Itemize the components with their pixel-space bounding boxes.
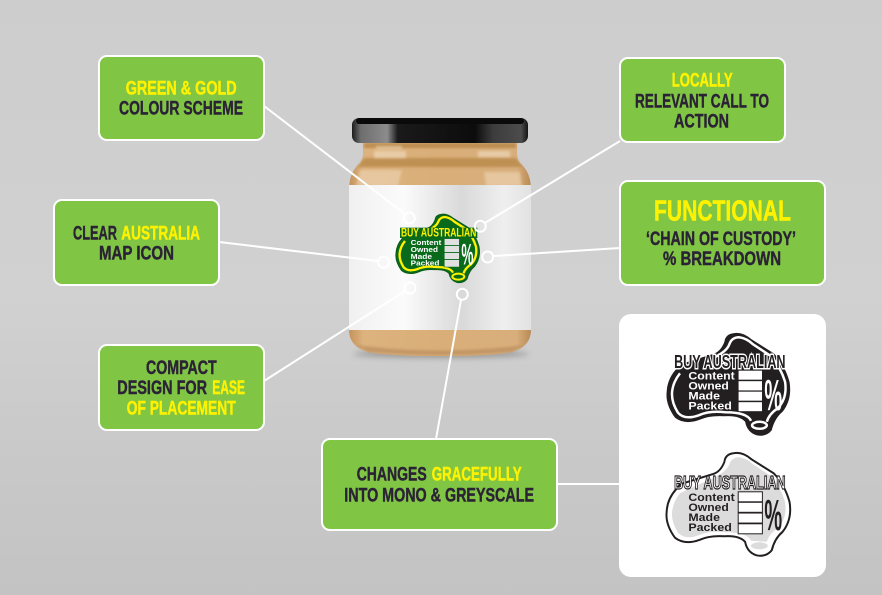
callout: map icon: CLEAR: [73, 223, 117, 245]
callout: mono and greyscale: INTO MONO & GREYSCALE: [344, 485, 534, 507]
callout: call to action: LOCALLY: [672, 70, 733, 92]
map shape: [666, 333, 790, 436]
row labels: [688, 492, 735, 534]
callout: compact design: DESIGN FOR: [117, 377, 207, 399]
island ring: [752, 422, 767, 429]
connector: call to action: [485, 141, 620, 223]
callout: call to action: [620, 58, 785, 142]
percentage boxes: [738, 370, 762, 412]
row labels: Content: [688, 370, 735, 382]
island ring: [452, 274, 464, 280]
callout: call to action: RELEVANT CALL TO: [635, 90, 769, 112]
neck highlights: [374, 146, 510, 158]
island: [751, 542, 768, 549]
connector: compact design: [264, 291, 405, 381]
connector: to mono panel: [557, 483, 619, 485]
connector: chain of custody: [494, 248, 620, 256]
neck shading: [364, 143, 516, 148]
colour logo: [396, 214, 479, 283]
row labels: Packed: [688, 522, 732, 534]
row labels: Owned: [411, 245, 438, 254]
row labels: Made: [688, 390, 720, 402]
callout: colour scheme: GREEN & GOLD: [126, 77, 237, 99]
shoulder highlights: [356, 170, 522, 186]
map grey fill: [672, 457, 786, 542]
jar shadow: [353, 350, 529, 358]
callout: chain of custody: ‘CHAIN OF CUSTODY’: [646, 228, 796, 250]
row labels: Packed: [688, 400, 732, 412]
marker: map icon: [378, 257, 389, 268]
row labels: Owned: [688, 380, 729, 392]
row labels: Content: [688, 492, 735, 504]
marker: colour scheme: [404, 212, 415, 224]
callout: mono and greyscale: [322, 439, 557, 530]
connector: colour scheme: [264, 106, 405, 214]
callout: compact design: COMPACT: [146, 357, 217, 379]
callout: chain of custody: FUNCTIONAL: [654, 196, 791, 228]
callout: mono and greyscale: CHANGES: [357, 464, 427, 486]
callout: compact design: OF PLACEMENT: [127, 398, 236, 420]
callout: mono and greyscale: GRACEFULLY: [432, 464, 522, 486]
callout: map icon: MAP ICON: [99, 243, 174, 265]
jar contents: [349, 142, 531, 356]
marker: call to action: [475, 221, 486, 232]
callout: map icon: AUSTRALIA: [121, 223, 200, 245]
marker: mono and greyscale: [457, 289, 468, 300]
lid top band: [356, 118, 524, 124]
map white outline: [672, 337, 786, 422]
greyscale logo: %: [764, 491, 782, 540]
callout: colour scheme: COLOUR SCHEME: [119, 97, 243, 119]
panel: mono and greyscale logos: [619, 314, 826, 577]
jar label: [349, 185, 531, 330]
mono logo: [666, 333, 790, 436]
callout: compact design: [99, 345, 264, 430]
mono logo: %: [764, 371, 782, 420]
marker: compact design: [404, 282, 416, 294]
row labels: Made: [688, 512, 720, 524]
row labels: [411, 238, 442, 268]
greyscale logo: [666, 453, 790, 556]
jar lid: [352, 118, 528, 143]
map gold outline: [400, 217, 476, 273]
row labels: Made: [411, 252, 432, 261]
banner text: BUY AUSTRALIAN: [674, 472, 786, 493]
row labels: [688, 370, 735, 412]
percentage boxes: [444, 239, 459, 267]
callout: chain of custody: [620, 181, 825, 285]
map shape: [396, 214, 479, 283]
banner band: [400, 228, 477, 238]
colour logo: %: [461, 238, 473, 271]
row labels: Owned: [688, 502, 729, 514]
banner text: BUY AUSTRALIAN: [401, 226, 476, 240]
row labels: Content: [411, 238, 442, 247]
lower rim shading: [355, 345, 525, 355]
callout: call to action: ACTION: [674, 110, 729, 132]
jar: [349, 118, 531, 358]
callout: colour scheme: [99, 56, 264, 140]
marker: chain of custody: [482, 252, 493, 262]
callout: map icon: [54, 200, 219, 285]
percentage boxes: [738, 492, 762, 534]
callout: compact design: EASE: [212, 377, 245, 399]
connector: map icon: [219, 242, 378, 261]
map shape: [666, 453, 790, 556]
row labels: Packed: [411, 259, 439, 268]
callout: chain of custody: % BREAKDOWN: [663, 248, 781, 270]
banner text: BUY AUSTRALIAN: [674, 351, 786, 372]
connector: mono and greyscale: [436, 300, 461, 439]
